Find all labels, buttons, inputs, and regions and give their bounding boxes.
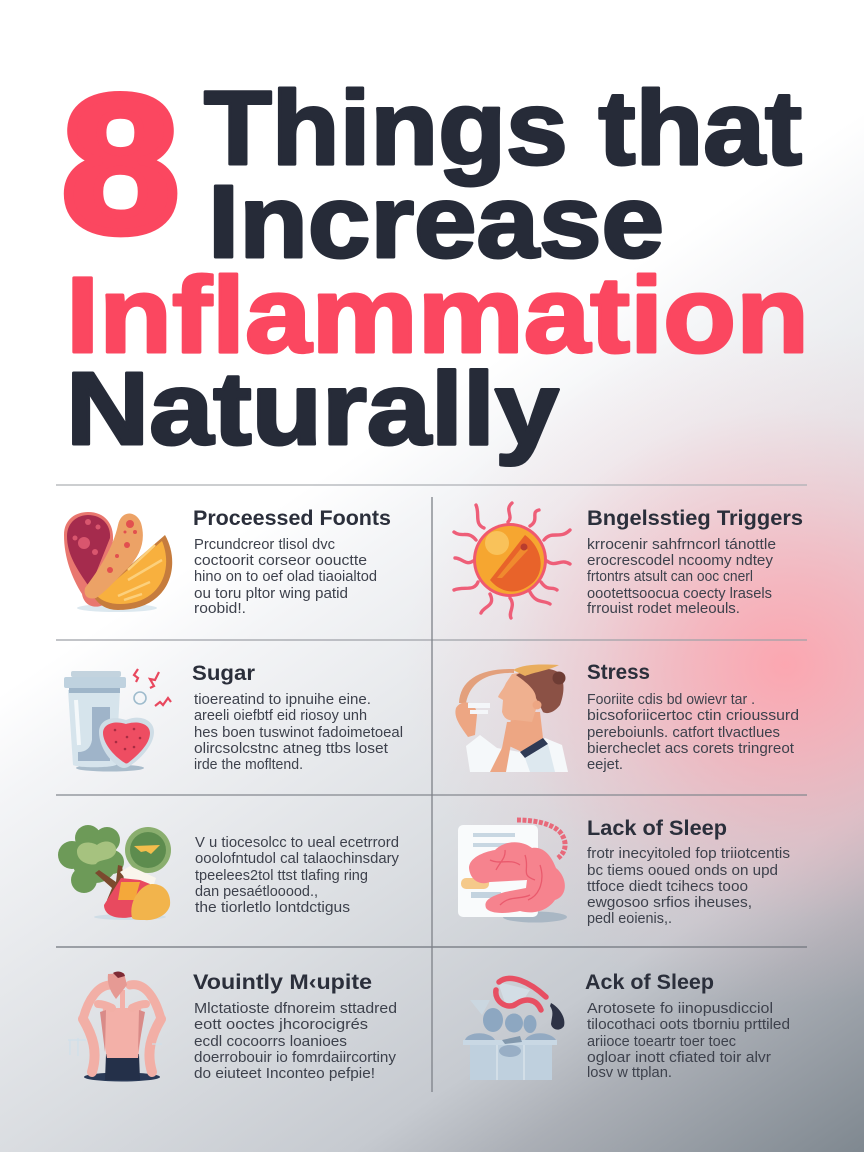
- body text: bicsoforiicertoc ctin crioussurd: [587, 707, 799, 724]
- body text: eejet.: [587, 756, 623, 773]
- body text: [195, 834, 399, 916]
- body text: Fooriite cdis bd owievr tar .: [587, 691, 755, 708]
- body text: the tiorletlo lontdctigus: [195, 899, 350, 916]
- body text: areeli oiefbtf eid riosoy unh: [194, 707, 367, 724]
- body text: biercheclet acs corets tringreot: [587, 740, 795, 757]
- title line: Things that: Things that: [204, 70, 802, 187]
- body text: Mlctatioste dfnoreim sttadred: [194, 1000, 397, 1017]
- icon: person with hands on head: [68, 972, 162, 1082]
- body text: oootettsoocua coecty lrasels: [587, 585, 772, 602]
- body text: Prcundcreor tlisol dvc: [194, 536, 335, 553]
- panel: stress: [455, 661, 799, 773]
- body text: Arotosete fo iinopusdicciol: [587, 1000, 773, 1017]
- body text: [587, 1000, 790, 1081]
- body text: [194, 1000, 397, 1082]
- panel: lack of sleep: [458, 817, 790, 927]
- panel: processed foods: [64, 507, 391, 617]
- body text: erocrescodel ncoomy ndtey: [587, 552, 773, 569]
- title line: Naturally: Naturally: [66, 351, 559, 466]
- body text: tioereatind to ipnuihe eine.: [194, 691, 371, 708]
- body text: tpeelees2tol ttst tlafing ring: [195, 867, 368, 884]
- body text: ooolofntudol cal talaochinsdary: [195, 850, 399, 867]
- body text: coctoorit corseor oouctte: [194, 552, 367, 569]
- title numeral 8: 8: [62, 56, 179, 273]
- body text: ariioce toeartr toer toec: [587, 1033, 736, 1050]
- body text: ewgosoo srfios iheuses,: [587, 894, 752, 911]
- panel: ack of sleep: [463, 971, 790, 1081]
- title line: Increase: Increase: [208, 164, 664, 279]
- title line: Inflammation: Inflammation: [66, 254, 809, 375]
- panel: sugar: [64, 662, 403, 773]
- icon: stressed person: [455, 665, 568, 772]
- body text: V u tiocesolcc to ueal ecetrrord: [195, 834, 399, 851]
- body text: do eiuteet Inconteo pefpie!: [194, 1065, 375, 1082]
- body text: doerrobouir io fomrdaiircortiny: [194, 1049, 397, 1066]
- body text: [587, 845, 790, 927]
- body text: pereboiunls. catfort tlvactlues: [587, 724, 780, 741]
- body text: roobid!.: [194, 600, 246, 617]
- body text: [194, 536, 377, 617]
- heading: Lack of Sleep: [587, 817, 727, 840]
- body text: frotr inecyitoled fop triiotcentis: [587, 845, 790, 862]
- body text: irde the mofltend.: [194, 756, 303, 773]
- body text: [587, 536, 776, 617]
- icon: machine: [463, 978, 564, 1080]
- icon: brain and notes: [458, 820, 567, 922]
- body text: frtontrs atsult can ooc cnerl: [587, 568, 753, 585]
- heading: Stress: [587, 661, 650, 684]
- body text: hino on to oef olad tiaoialtod: [194, 568, 377, 585]
- body text: [194, 691, 403, 773]
- panel: person: [68, 971, 397, 1082]
- body text: eott ooctes jhcorocigrés: [194, 1016, 368, 1033]
- heading: Bngelsstieg Triggers: [587, 507, 803, 530]
- body text: hes boen tuswinot fadoimetoeal: [194, 724, 403, 741]
- icon: tree and fruit: [58, 825, 171, 920]
- title: [62, 56, 809, 466]
- panel: tree and foods: [58, 825, 399, 920]
- heading: Sugar: [192, 662, 255, 685]
- body text: pedl eoienis,.: [587, 910, 672, 927]
- body text: tilocothaci oots tborniu prttiled: [587, 1016, 790, 1033]
- heading: Vouintly M‹upite: [193, 971, 372, 994]
- body text: losv w ttplan.: [587, 1064, 672, 1081]
- panel: triggers: [454, 503, 803, 618]
- icon: food: [64, 512, 172, 612]
- body text: dan pesaétlooood.,: [195, 883, 318, 900]
- body text: ecdl cocoorrs loanioes: [194, 1033, 347, 1050]
- body text: frrouist rodet meleouls.: [587, 600, 740, 617]
- body text: olircsolcstnc atneg ttbs loset: [194, 740, 389, 757]
- icon: cup and heart: [64, 669, 171, 772]
- body text: ttfoce diedt tcihecs tooo: [587, 878, 748, 895]
- heading: Proceessed Foonts: [193, 507, 391, 530]
- body text: ou toru pltor wing patid: [194, 585, 348, 602]
- body text: krrocenir sahfrncorl tánottle: [587, 536, 776, 553]
- icon: sun: [454, 503, 570, 618]
- body text: bc tiems ooued onds on upd: [587, 862, 778, 879]
- heading: Ack of Sleep: [585, 971, 714, 994]
- body text: ogloar inott cfiated toir alvr: [587, 1049, 771, 1066]
- body text: [587, 691, 799, 773]
